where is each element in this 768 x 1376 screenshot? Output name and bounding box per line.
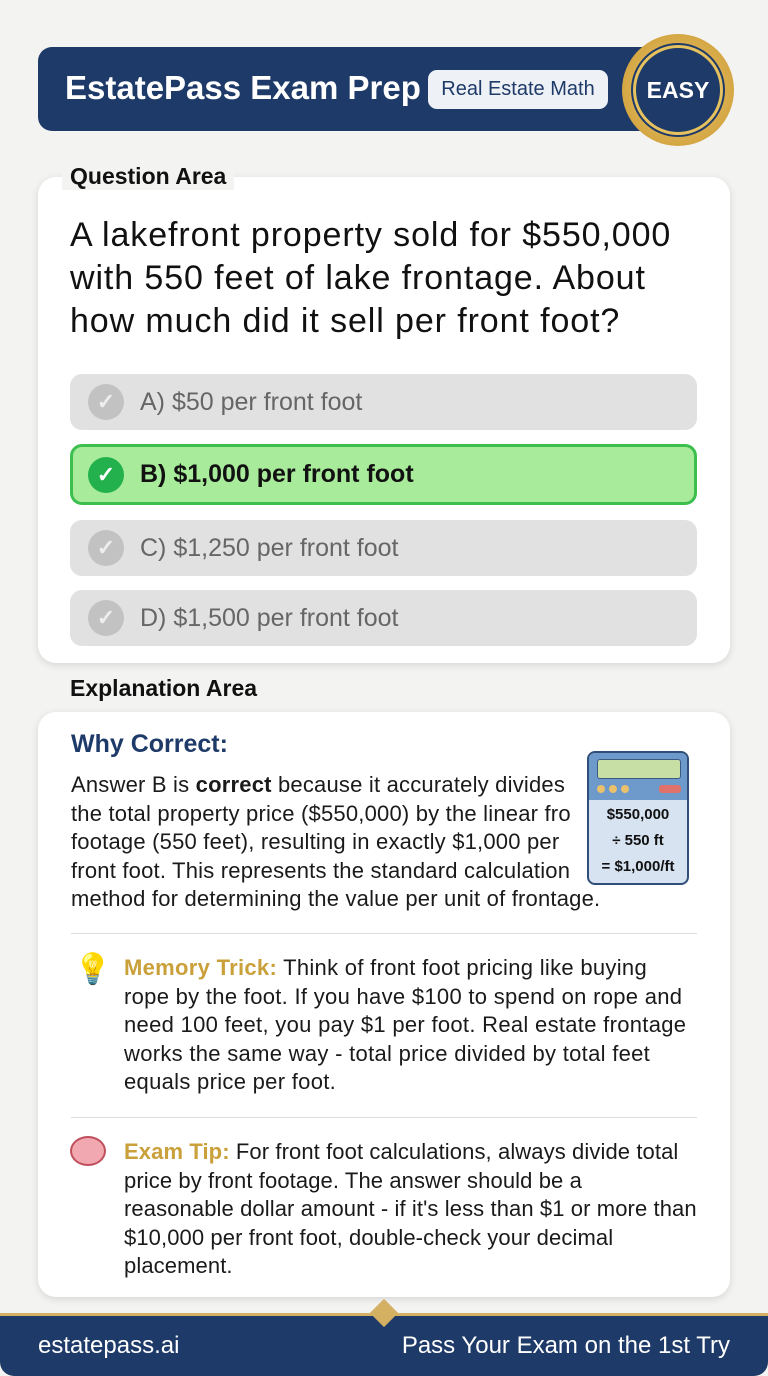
question text: how much did it sell per front foot? [70, 302, 620, 340]
option C [70, 520, 697, 576]
exam tip text [124, 1139, 697, 1278]
why correct text [71, 772, 600, 911]
heading: Question Area: Question Area [70, 163, 226, 189]
icon: brain [70, 1136, 106, 1166]
option D: D) $1,500 per front foot [140, 604, 398, 632]
footer left text: estatepass.ai [38, 1332, 179, 1359]
option A: ✓ [97, 389, 115, 414]
icon: calculator: ÷ 550 ft [612, 832, 664, 849]
exam tip text: reasonable dollar amount - if it's less than $1 or more than [124, 1196, 697, 1221]
exam tip text: placement. [124, 1253, 233, 1278]
memory trick text: works the same way - total price divided by total feet [124, 1040, 650, 1066]
why correct text: footage (550 feet), resulting in exactly $1,000 per [71, 829, 559, 854]
why correct text: front foot. This represents the standard calculation [71, 858, 570, 882]
title: EstatePass Exam Prep [65, 69, 421, 106]
memory trick text: equals price per foot. [124, 1069, 336, 1094]
gold diamond [370, 1299, 398, 1327]
memory trick text: rope by the foot. If you have $100 to spend on rope and [124, 984, 682, 1008]
exam tip text: Exam Tip: For front foot calculations, always divide total [124, 1139, 678, 1164]
memory trick text: Memory Trick: Think of front foot pricing like buying [124, 955, 647, 980]
question text: A lakefront property sold for $550,000 [70, 216, 671, 254]
badge: EASY [622, 34, 734, 146]
heading: Why Correct: Why Correct: [71, 730, 228, 758]
tag: Real Estate Math [428, 70, 608, 109]
icon: calculator [587, 751, 689, 885]
heading: Explanation Area: Explanation Area [70, 675, 257, 701]
option B correct: ✓ [97, 462, 115, 486]
panel: explanation [38, 712, 730, 1297]
icon: calculator: $550,000 [607, 806, 669, 823]
footer right text: Pass Your Exam on the 1st Try [402, 1332, 730, 1359]
option B correct [70, 444, 697, 505]
option C: C) $1,250 per front foot [140, 534, 398, 562]
option A [70, 374, 697, 430]
panel: question [38, 177, 730, 663]
option B correct: B) $1,000 per front foot [140, 460, 414, 488]
icon: lightbulb: 💡 [74, 953, 111, 986]
question text [70, 216, 671, 340]
option A: A) $50 per front foot [140, 388, 362, 416]
question text: with 550 feet of lake frontage. About [70, 259, 646, 297]
tag: Real Estate Math: Real Estate Math [441, 78, 595, 100]
why correct text: method for determining the value per unit of frontage. [71, 886, 600, 911]
why correct text: Answer B is correct because it accurately divides [71, 772, 565, 797]
footer [0, 1313, 768, 1376]
icon: calculator: = $1,000/ft [602, 858, 674, 875]
option D [70, 590, 697, 646]
why correct text: the total property price ($550,000) by the linear fro [71, 800, 571, 826]
memory trick text: need 100 feet, you pay $1 per foot. Real estate frontage [124, 1012, 686, 1037]
header bar [38, 47, 678, 131]
exam tip text: price by front footage. The answer should be a [124, 1168, 582, 1192]
memory trick text [124, 955, 686, 1094]
badge: EASY: EASY [647, 76, 709, 102]
exam tip text: $10,000 per front foot, double-check your decimal [124, 1224, 613, 1250]
option D: ✓ [97, 605, 115, 630]
option C: ✓ [97, 535, 115, 560]
